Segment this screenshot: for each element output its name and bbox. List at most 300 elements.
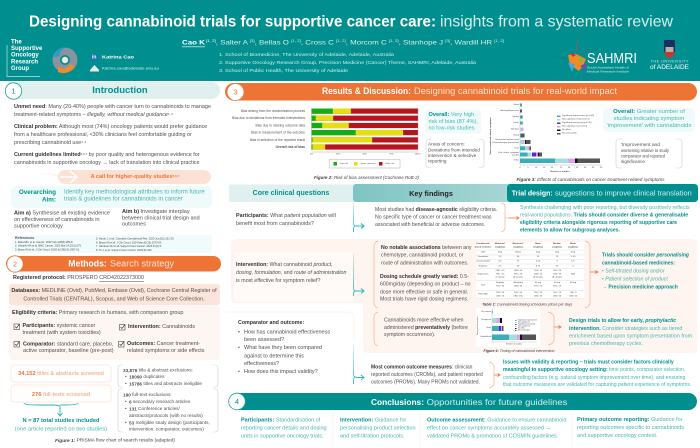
exclusions: full text: • (125, 406, 127, 411)
header band (0, 0, 700, 81)
suggestion: participants: Synthesis challenging with poor reporting, but diversity positively reflects (520, 205, 690, 211)
table: cannabinoid dosing: 18 (517, 265, 520, 267)
panel: overarching aim: trials & guidelines for cannabinoids in cancer (64, 196, 183, 202)
table: cannabinoid dosing: (mg/day) (495, 246, 505, 248)
chart: effects on symptoms: Oral, throat, symptom (498, 151, 519, 154)
conclusion: outcome assessment: Outcome assessment: Guidance to ensure cannabinoid (427, 418, 566, 424)
suggestion: validity and reporting: Issues with validity & reporting – trials must consider factors clinically (503, 359, 674, 365)
suggestion: validity and reporting: meaningful to supportive oncology setting: time points, comparator selection, (503, 367, 685, 373)
chart: timing of intervention: Early (486, 327, 491, 329)
table: cannabinoid dosing: 5, 40 (571, 256, 576, 258)
table: cannabinoid dosing: 0.5 (498, 265, 502, 267)
finding: preventative timing: administered preventatively (before (384, 325, 468, 331)
chart: effects on symptoms: 20 (551, 167, 554, 169)
flow box: titles screened (11, 365, 111, 382)
table: cannabinoid dosing: CBD: 50 (534, 296, 543, 298)
contact: LinkedIn (91, 54, 134, 60)
table: cannabinoid dosing: CBD: 50 (553, 296, 562, 298)
references: 5. Hardy J, et al. Cannabis Cannabinoid Res. 2020 Jun;5(2):121-30. (96, 236, 174, 240)
card: comparator and outcome question: • (238, 330, 240, 336)
intro text: treatment-related symptoms – illegally, without medical guidance (14, 112, 168, 118)
callout: improvement definition (616, 139, 682, 168)
chart: timing of intervention: Non-significant (518, 324, 530, 328)
chart: timing of intervention: No effect (518, 326, 526, 330)
exclusions: titles: 18090 duplicates (129, 374, 165, 379)
table: cannabinoid dosing: 2.25 (536, 261, 541, 263)
table: cannabinoid dosing: THC: 30 (496, 286, 505, 288)
table: cannabinoid dosing: (8 sprays) (513, 276, 523, 279)
table: cannabinoid dosing: Median (553, 243, 561, 245)
table: cannabinoid dosing: (mg/day) (513, 246, 523, 248)
table: cannabinoid dosing: 5mg (571, 252, 576, 254)
chart: effects on symptoms: Number of studies (550, 170, 570, 173)
chart: risk of bias: 25% (336, 154, 340, 156)
finding: outcome measures (371, 364, 483, 386)
chart: effects on symptoms: Quality (512, 115, 520, 118)
intro text (14, 104, 211, 166)
callout: call for higher-quality studies: 5,6,7 (173, 174, 180, 178)
logo: Supportive Oncology Research Group: Research (11, 59, 38, 65)
logo: SAHMRI (555, 39, 637, 78)
table: cannabinoid dosing: THC: 25 (534, 292, 543, 294)
table: cannabinoid dosing: THC: 25 (553, 286, 562, 288)
legend: Non-significant improvement (562, 118, 590, 121)
table: cannabinoid dosing: Levonantradol (476, 260, 490, 263)
criterion: participants: Participants: systemic cancer (22, 323, 96, 329)
chart: effects on symptoms: 5 (527, 167, 529, 169)
intro text: prescribing cannabinoid use (14, 140, 81, 146)
references (12, 235, 212, 253)
finding: preventative timing (384, 318, 468, 338)
exclusions: full text: 190 full-text exclusions: (123, 392, 172, 397)
aim a (14, 211, 110, 229)
table: cannabinoid dosing: 20 (537, 256, 540, 258)
table: cannabinoid dosing: CBD: 0.5 (496, 270, 505, 272)
finding: outcome measures: reported outcomes (CROMs), and patient reported (371, 372, 483, 378)
exclusions: full text: abstracts/protocols (with no results) (129, 413, 203, 418)
finding: outcome measures: Most common outcome measures: clinician (371, 364, 473, 370)
table: cannabinoid dosing: Maximum* (513, 243, 524, 245)
legend: Significant worsening (p<0.05) (562, 121, 592, 124)
section 2 heading: Methods: Search strategy (110, 258, 175, 268)
card: comparator and outcome question: been assessed? (244, 337, 284, 343)
conclusion: primary outcome reporting (577, 417, 684, 439)
finding: preventative timing: Cannabinoids more effective when (384, 318, 464, 324)
references: References (15, 236, 34, 240)
authors: [1, 2] (494, 39, 504, 43)
authors: , Salter A (216, 39, 250, 46)
affiliations (219, 52, 477, 73)
chart: effects on symptoms: Lipids (513, 122, 520, 124)
section 2 heading: Methods: 2 (13, 260, 17, 268)
question: participants: benefit most from cannabinoids? (236, 221, 314, 227)
legend: Non-significant worsening (562, 125, 588, 128)
table: cannabinoid dosing: Minimum* (495, 243, 505, 245)
chart: risk of bias: 100% (415, 154, 420, 156)
title (29, 14, 674, 30)
table: cannabinoid dosing: CBD: 25 (496, 296, 505, 298)
legend (330, 160, 400, 168)
exclusions: full text: • (125, 399, 127, 404)
background: intervention row (231, 239, 697, 353)
aim b: between clinical trial design and (122, 215, 200, 221)
section 4 heading: conclusions: Opportunities for future guidelines (427, 397, 567, 407)
card: comparator and outcome question: How has cannabinoid effectiveness (244, 330, 330, 336)
table: cannabinoid dosing: 0.5 (571, 261, 575, 263)
table: cannabinoid dosing: 1.5 (498, 256, 502, 258)
caption: figure 2: Figure 2: Risk of bias assessment (Cochrane RoB-2) (314, 174, 420, 180)
question: participants: Participants: What patient population will (236, 213, 336, 219)
card: comparator and outcome question: Comparator and outcome: (238, 320, 304, 326)
chart: risk of bias: Bias due to deviations from intended interventions (232, 116, 305, 120)
caption: figure 1: Figure 1: PRISMA flow chart of search results (adapted) (55, 438, 175, 444)
panel: overarching aim: Identify key methodological attributes to inform future (64, 190, 205, 196)
panel: overarching aim: Overarching (19, 189, 56, 196)
heading: core clinical questions: Core clinical questions (253, 190, 329, 197)
panel: overarching aim (11, 186, 212, 208)
table: cannabinoid dosing: N/A (571, 272, 575, 275)
chart: timing of intervention: Established (481, 335, 491, 338)
intro text: 5,6,7 (80, 152, 88, 156)
callout: improvement definition: worsening relative to study (621, 148, 670, 153)
logo: Supportive Oncology Research Group: Supportive (11, 46, 43, 52)
conclusion: primary outcome reporting: and supportive oncology context. (577, 433, 658, 439)
legend: No effect (562, 128, 571, 131)
section 3 heading: results and discussion: Designing cannabinoid trials for real-world impact (414, 86, 618, 96)
callout: overall risk of bias: risk of bias (87.4%), (428, 119, 478, 125)
aim a: on effectiveness of cannabinoids in (14, 217, 100, 223)
chart: effects on symptoms: Pain (515, 147, 520, 149)
heading: trial design (507, 184, 698, 202)
conclusion: participants: units in supportive oncology trials. (241, 434, 324, 440)
suggestion: validity and reporting: confounding factors (e.g. natural symptom improvement over time), and ensuring (503, 375, 685, 381)
contact: email (90, 65, 159, 72)
chart: timing of intervention: Not extractable (518, 328, 530, 332)
conclusion: intervention: personalising product selection (340, 426, 416, 432)
references: 2. Urbanik MA et al. BMC Cancer. 2022 Mar 24;22(1):275. (15, 244, 82, 248)
callout: overall symptom improvement: studies indicating symptom (614, 116, 684, 122)
intro text: by poor quality and heterogenous evidence for (87, 152, 200, 158)
bracket: outcomes to validity (489, 362, 500, 388)
arrow: comparator to findings (354, 345, 364, 384)
table: cannabinoid dosing: CBD: 100 (513, 296, 524, 298)
aim b: Aim b) Investigate interplay (122, 209, 190, 215)
references: 7. Hardman RJ et al. Support Care Cancer. 2023;31(1):5. (96, 244, 162, 248)
finding: intervention: No notable associations between any (381, 245, 472, 251)
card: comparator and outcome question: What have they been compared (244, 345, 322, 351)
table: cannabinoid dosing: Cannabinoid- (476, 243, 490, 245)
panel: databases: Controlled Trials (CENTRAL), Scopus, and Web of Science Core Collection. (23, 296, 205, 302)
legend: Significant improvement (p<0.05) (562, 114, 594, 117)
chart: timing of intervention: Number of studies (506, 342, 522, 346)
section 1 heading: Introduction: Introduction (92, 85, 148, 96)
table: cannabinoid dosing (475, 242, 584, 299)
suggestion: personalising medicines: Trials should consider personalising (602, 253, 689, 259)
table: cannabinoid dosing: Nabilone (479, 265, 488, 267)
finding: intervention: 600mg/day (depending on product – no (380, 282, 471, 288)
callout: overall risk of bias: no low-risk studies (428, 126, 475, 132)
finding: outcome measures: outcomes (PROMs). Many PROMs not validated. (371, 380, 480, 386)
conclusion: outcome assessment: effect on cancer symptoms accurately assessed → (427, 426, 551, 432)
table: cannabinoid dosing: Mode (570, 243, 577, 245)
table: cannabinoid dosing: THC: 25 (534, 286, 543, 288)
included studies (15, 418, 107, 432)
callout: overall symptom improvement: 'improvement' with cannabinoids (607, 123, 691, 129)
chart: risk of bias: Bias arising from the randomization process (241, 109, 305, 113)
chart: effects on symptoms: Cancer treatment-related symptoms (489, 117, 492, 155)
callout: areas of concern: Areas of concern: (428, 142, 465, 146)
affiliations: 3. School of Public Health, The University of Adelaide (219, 68, 349, 73)
card: comparator and outcome question: How does this impact validity? (244, 369, 318, 375)
chart: effects on symptoms: 25 (560, 167, 563, 169)
chart: effects on symptoms: Mood (514, 135, 520, 137)
table: cannabinoid dosing: 4mg/day (496, 282, 505, 284)
chart: risk of bias: 75% (389, 154, 394, 156)
exclusions: titles: 33,876 title & abstract exclusions: (123, 368, 193, 372)
legend: High risk (386, 162, 395, 165)
row 5 (312, 137, 418, 142)
affiliations: 1. School of Biomedicine, The University of Adelaide, Adelaide, Australia (219, 52, 395, 57)
callout: call for higher-quality studies: A call for higher-quality studies (91, 174, 173, 180)
suggestion: personalising medicines: → Precision medicine approach (602, 285, 678, 291)
chart: effects on symptoms: Gastrointestinal/mucosal (495, 138, 520, 141)
legend: Low risk (340, 162, 349, 165)
finding: intervention (380, 245, 472, 303)
suggestion: prophylactic intervention (569, 318, 693, 347)
logo: Supportive Oncology Research Group (7, 40, 43, 76)
chart: effects on symptoms: 15 (543, 167, 546, 169)
heading: core clinical questions (229, 184, 357, 202)
chart: effects on symptoms: 30 (568, 167, 571, 169)
authors: [1, 2] (336, 39, 346, 43)
table: cannabinoid dosing: THC: 50 (514, 292, 523, 294)
logo: University of Adelaide (650, 40, 689, 71)
chart: effects on symptoms: (chemotherapy, perception) (492, 141, 519, 144)
finding: preventative timing: symptom occurrence). (384, 332, 435, 338)
suggestion: personalising medicines (602, 253, 689, 291)
caption: figure 3: Figure 3: Effects of cannabinoids on cancer treatment-related symptoms (516, 176, 665, 182)
suggestion: personalising medicines: • Self-titrated dosing and/or (602, 269, 665, 275)
table: cannabinoid dosing: CBD: 25 (534, 273, 543, 275)
exclusions: titles: • (125, 374, 127, 379)
chart: timing of intervention (476, 308, 540, 347)
heading: trial design: suggestions to improve clinical translation (555, 189, 692, 197)
arrow: to included studies (24, 403, 78, 416)
chart: effects on symptoms: Sleep (513, 104, 520, 106)
chart: timing of intervention: Significant improvement (518, 318, 538, 322)
table: cannabinoid dosing: (mg/day) (552, 246, 562, 248)
aim b: outcomes (122, 222, 146, 228)
panel: overarching aim: Aim: (42, 196, 56, 204)
chart: risk of bias: Bias due to missing outcome data (256, 124, 305, 128)
intro text: Current guidelines limited (14, 152, 80, 158)
chart: effects on symptoms: Anxiety/depression (501, 109, 520, 112)
callout: areas of concern: reporting (428, 158, 447, 164)
chart: effects on symptoms: 10 (535, 167, 538, 169)
conclusion: participants: reporting cancer details and dosing (241, 426, 327, 432)
authors: , Stanhope J (399, 39, 445, 46)
section 1 heading: Introduction (5, 82, 220, 99)
included studies: N = 87 total studies included (23, 418, 100, 424)
legend: Not extractable (562, 132, 577, 135)
table: cannabinoid dosing: (mg/day) (568, 246, 578, 248)
intro text: 3, 4 (81, 140, 86, 144)
panel: eligibility criteria: Eligibility criteria: Primary research in humans, with comparison group (12, 310, 183, 316)
table: cannabinoid dosing: 3 (556, 261, 558, 263)
card: intervention question (233, 251, 354, 302)
chart: effects on symptoms: burden (512, 154, 520, 157)
icon: circular logo (52, 47, 78, 73)
callout: improvement definition: significance (621, 159, 645, 164)
table: cannabinoid dosing: (mg/day) (533, 246, 543, 248)
suggestion: prophylactic intervention: intervention. Consider strategies such as tiered (569, 326, 682, 332)
criterion: participants: treatment (with system toxicities) (22, 330, 101, 336)
table: cannabinoid dosing: THC: 0.5 (496, 273, 505, 275)
callout: areas of concern: intervention & selective (428, 153, 477, 158)
authors: [1, 2] (291, 39, 301, 43)
chart: effects on symptoms: 40 (584, 167, 587, 169)
criterion: outcomes: Outcomes: Cancer treatment- (127, 341, 200, 347)
contact: LinkedIn: in (92, 54, 96, 60)
logo: Supportive Oncology Research Group: The (11, 40, 22, 46)
exclusions: full text: • (125, 420, 127, 425)
aim a: supportive oncology (14, 223, 63, 229)
criterion: outcomes (118, 341, 205, 354)
conclusion: participants (241, 418, 327, 440)
logo: Supportive Oncology Research Group: Oncology (11, 53, 39, 59)
criterion: comparator: active comparator, baseline (pre-post) (23, 348, 114, 354)
logo: SAHMRI: South Australian Health & (587, 65, 630, 69)
chart: risk of bias: Bias in selection of the reported result (250, 138, 305, 142)
table: cannabinoid dosing: (1 spray) (496, 276, 505, 279)
table: cannabinoid dosing: THC: 5 (570, 292, 577, 294)
table: cannabinoid dosing: THC/CBD (478, 294, 488, 296)
finding: intervention: route of administration with outcomes. (381, 260, 468, 266)
finding: participants: associated with beneficial or adverse outcomes. (375, 222, 485, 228)
heading: trial design: Trial design: (512, 189, 553, 197)
finding: participants: No specific type of cancer or cancer treatment was (375, 214, 492, 220)
panel: databases: Databases: MEDLINE (Ovid), PubMed, Embase (Ovid), Cochrane Central Register of (11, 288, 217, 294)
section 4 heading: conclusions: 4 (235, 397, 239, 406)
logo: SAHMRI: Medical Research Institute (587, 70, 629, 74)
callout: areas of concern (426, 140, 484, 168)
included studies: (one article reported on two studies) (15, 426, 107, 432)
table: cannabinoid dosing: 3.75 (536, 265, 541, 267)
table: cannabinoid dosing: THC: 50 (496, 292, 505, 294)
section 1 heading: Introduction: 1 (11, 86, 16, 96)
callout: areas of concern: Deviations from intended (428, 148, 480, 152)
section 2 heading: Methods (6, 256, 221, 272)
arrow: intervention to findings (354, 254, 364, 296)
table: cannabinoid dosing: 5mg (536, 252, 541, 254)
bracket: intervention findings (374, 241, 378, 308)
flow box: titles screened: 34,152 titles & abstracts screened (18, 371, 104, 377)
logo: University of Adelaide: THE UNIVERSITY (650, 60, 689, 64)
table: cannabinoid dosing: (8 sprays) (552, 276, 562, 279)
callout: improvement definition: comparator and reported (621, 154, 665, 158)
exclusions: full text: 131 Conference articles/ (129, 406, 181, 411)
conclusion: intervention: Intervention: Guidance for (340, 418, 406, 424)
table: cannabinoid dosing: 45 mg (535, 282, 542, 284)
caption: table 1: Table 1: Cannabinoid dosing schedules (dose per day) (482, 302, 573, 306)
authors: [1, 2] (389, 39, 399, 43)
table: cannabinoid dosing: THC: 20 (534, 270, 543, 272)
card: comparator and outcome question: • (238, 369, 240, 375)
conclusion: intervention: and self-titration protocols. (340, 434, 405, 440)
suggestion: personalising medicines: • Patient selection of product (602, 276, 668, 282)
exclusions: full text (118, 389, 218, 432)
table: cannabinoid dosing: 40 mg (570, 282, 577, 284)
table: cannabinoid dosing: 5mg (498, 252, 503, 254)
criterion: participants (14, 323, 101, 336)
bracket: timing to prophylactic (548, 312, 561, 345)
chart: effects on symptoms: Nutrition (511, 128, 520, 131)
exclusions: titles: • (125, 381, 127, 386)
row 1 (312, 108, 418, 114)
logo: University of Adelaide: of ADELAIDE (650, 65, 689, 71)
callout: overall risk of bias: Overall: Very high (428, 112, 474, 118)
authors: , Wardill HR (450, 39, 494, 46)
registered protocol: Registered protocol: PROSPERO CRD42022373000 (13, 275, 144, 281)
suggestion: participants (520, 205, 690, 234)
table: cannabinoid dosing: CBD: 50 (514, 286, 523, 288)
conclusion: participants: Participants: Standardisation of (241, 418, 321, 424)
arrow: participants to findings (354, 202, 364, 232)
aim a: Aim a) Synthesise all existing evidence (14, 211, 110, 217)
suggestion: validity and reporting (503, 359, 691, 388)
references: 1. Mata MD, et al. Cancer. 2022 Feb;128(3):385-8. (15, 240, 73, 244)
finding: participants (375, 207, 497, 228)
table: cannabinoid dosing: CBD: 50 (514, 270, 523, 272)
criterion: intervention: Intervention: Cannabinoids (128, 324, 195, 330)
table: cannabinoid dosing: 40mg/day (513, 282, 524, 284)
chart: effects on symptoms (489, 102, 603, 173)
flow box: full texts screened: 276 full-texts screened (32, 392, 90, 398)
table: cannabinoid dosing: Nabiximols (478, 273, 489, 275)
authors: [3] (445, 39, 450, 43)
exclusions: full text: 6 secondary research articles (129, 399, 191, 404)
caption: figure 4: Figure 4: Timing of cannabinoid intervention (484, 349, 554, 353)
authors: , Bellas O (255, 39, 291, 46)
table: cannabinoid dosing: 15 (517, 261, 520, 263)
intro text: from a healthcare professional, <30% clinicians feel comfortable guiding or (14, 132, 192, 138)
legend: Some concerns (360, 162, 377, 165)
table: cannabinoid dosing: 3 (572, 265, 574, 267)
authors: [3] (250, 39, 255, 43)
callout: call for higher-quality studies (28, 170, 211, 184)
authors (182, 39, 504, 46)
callout: overall symptom improvement (603, 108, 695, 132)
finding: intervention: dose more effective or safe in general. (380, 289, 468, 295)
exclusions: full text: 53 Ineligible study design (participants, (129, 420, 210, 425)
suggestion: participants: elements to allow for subgroup analyses. (520, 228, 621, 234)
contact: LinkedIn: Katrina Cao (102, 54, 134, 60)
panel: eligibility criteria (9, 305, 220, 360)
table: cannabinoid dosing: 10 (556, 256, 559, 258)
table: cannabinoid dosing: 40 (517, 256, 520, 258)
table: cannabinoid dosing: 60mg (515, 252, 522, 254)
table: cannabinoid dosing: (8 sprays) (533, 276, 543, 279)
bracket: participants to trial design (501, 203, 519, 232)
chart: risk of bias: 50% (363, 154, 367, 156)
chart: risk of bias: 0% (310, 154, 313, 156)
row 4 (312, 130, 418, 135)
bracket: intervention to personalising (585, 241, 598, 308)
card: intervention question: dosing, formulation, and route of administration (236, 270, 346, 276)
suggestion: prophylactic intervention: Design trials to allow for early, prophylactic (569, 318, 676, 324)
criterion: outcomes: related symptoms or side effects (127, 348, 205, 354)
section 4 heading: conclusions (229, 393, 697, 410)
